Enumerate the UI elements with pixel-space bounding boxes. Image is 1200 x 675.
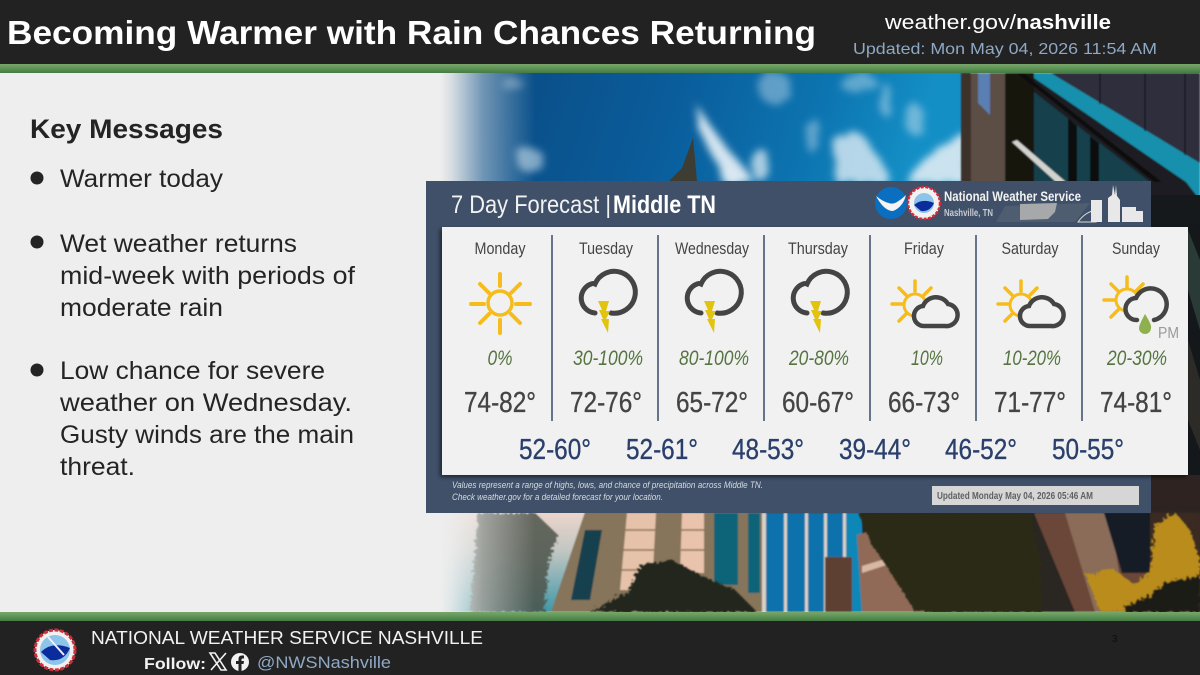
icon: thunderstorm, Thursday	[793, 271, 847, 333]
church spire	[669, 138, 697, 181]
message 3: threat.	[60, 453, 135, 481]
message 2: Wet weather returns	[60, 230, 297, 258]
icon: X	[210, 653, 226, 670]
header bar	[0, 0, 1200, 73]
footer bar	[0, 612, 1200, 675]
page number: 3	[1112, 634, 1118, 645]
low temperatures: 48-53°	[732, 434, 804, 466]
precipitation chances: 30-100%	[573, 347, 643, 370]
website link: nashville	[1016, 12, 1111, 34]
icon: Nashville skyline	[1078, 185, 1143, 222]
key messages panel	[30, 114, 355, 481]
forecast title: Middle TN	[613, 191, 716, 219]
social handle: @NWSNashville	[257, 653, 391, 672]
high temperatures: 72-76°	[570, 387, 642, 419]
icon: partly cloudy, Friday	[892, 281, 958, 326]
forecast footnote	[452, 480, 763, 502]
precipitation chances: 20-80%	[788, 347, 849, 370]
message 2	[30, 230, 355, 322]
icon: partly cloudy with rain, Sunday: PM	[1158, 325, 1179, 342]
precipitation chances: 0%	[488, 347, 512, 370]
forecast updated box: Updated Monday May 04, 2026 05:46 AM	[937, 490, 1093, 502]
high temperatures: 71-77°	[994, 387, 1066, 419]
message 2: mid-week with periods of	[60, 262, 355, 290]
icon: partly cloudy, Saturday	[998, 281, 1064, 326]
high temperatures	[464, 387, 1172, 419]
icon: Facebook	[231, 653, 249, 671]
forecast footnote: Check weather.gov for a detailed forecast for your location.	[452, 492, 663, 502]
updated time: Updated: Mon May 04, 2026 11:54 AM	[853, 41, 1157, 58]
forecast footnote: Values represent a range of highs, lows, and chance of precipitation across Middle TN.	[452, 480, 763, 490]
trees and foliage	[470, 512, 1200, 612]
message 3: weather on Wednesday.	[59, 389, 352, 417]
heading: key messages: Key Messages	[30, 114, 223, 144]
icon: NWS seal	[35, 630, 75, 670]
low temperatures: 52-61°	[626, 434, 698, 466]
icon: thunderstorm, Tuesday	[581, 271, 635, 333]
low temperatures: 52-60°	[519, 434, 591, 466]
day names: Monday	[474, 239, 526, 258]
precipitation chances	[488, 347, 1167, 370]
NWS Nashville label	[944, 188, 1081, 219]
day names: Tuesday	[579, 239, 633, 258]
lower buildings	[440, 510, 1200, 612]
low temperatures	[519, 434, 1124, 466]
icon: sunny, Monday	[471, 274, 530, 333]
message 3: Gusty winds are the main	[60, 421, 354, 449]
follow label: Follow:	[144, 656, 206, 673]
day names: Saturday	[1002, 239, 1059, 258]
low temperatures: 46-52°	[945, 434, 1017, 466]
message 3: Low chance for severe	[60, 357, 325, 385]
high temperatures: 74-81°	[1100, 387, 1172, 419]
forecast title	[451, 191, 716, 219]
day names: Friday	[904, 239, 944, 258]
background photo: city buildings against a blue sky	[440, 72, 1200, 612]
title: Becoming Warmer with Rain Chances Returning	[7, 14, 816, 51]
forecast title: 7 Day Forecast |	[451, 191, 611, 219]
message 2: moderate rain	[60, 294, 223, 322]
website link: weather.gov/	[884, 12, 1016, 34]
message 1: Warmer today	[60, 165, 224, 193]
website link	[884, 12, 1111, 34]
forecast updated box	[932, 486, 1139, 505]
map of Tennessee	[996, 203, 1090, 222]
day names: Sunday	[1112, 239, 1160, 258]
precipitation chances: 10-20%	[1003, 347, 1061, 370]
icon: NWS logo	[908, 187, 940, 219]
precipitation chances: 10%	[911, 347, 943, 370]
day names: Thursday	[788, 239, 848, 258]
high temperatures: 60-67°	[782, 387, 854, 419]
right glass building	[960, 73, 1200, 195]
day dividers	[551, 235, 1083, 421]
day names	[474, 239, 1160, 258]
NWS Nashville label: Nashville, TN	[944, 208, 993, 219]
high temperatures: 65-72°	[676, 387, 748, 419]
white fade over left edge of photo	[440, 73, 535, 612]
precipitation chances: 20-30%	[1106, 347, 1167, 370]
message 3	[30, 357, 354, 481]
high temperatures: 74-82°	[464, 387, 536, 419]
low temperatures: 50-55°	[1052, 434, 1124, 466]
icon: thunderstorm, Wednesday	[687, 271, 741, 333]
high temperatures: 66-73°	[888, 387, 960, 419]
panel: 7 day forecast	[426, 181, 1188, 513]
forecast table card	[442, 227, 1188, 475]
icon: NOAA logo	[875, 187, 907, 219]
precipitation chances: 80-100%	[679, 347, 749, 370]
day names: Wednesday	[675, 239, 749, 258]
low temperatures: 39-44°	[839, 434, 911, 466]
NWS Nashville label: National Weather Service	[944, 188, 1081, 204]
icon: partly cloudy with rain, Sunday	[1104, 277, 1179, 342]
footer organization name: NATIONAL WEATHER SERVICE NASHVILLE	[91, 628, 483, 648]
